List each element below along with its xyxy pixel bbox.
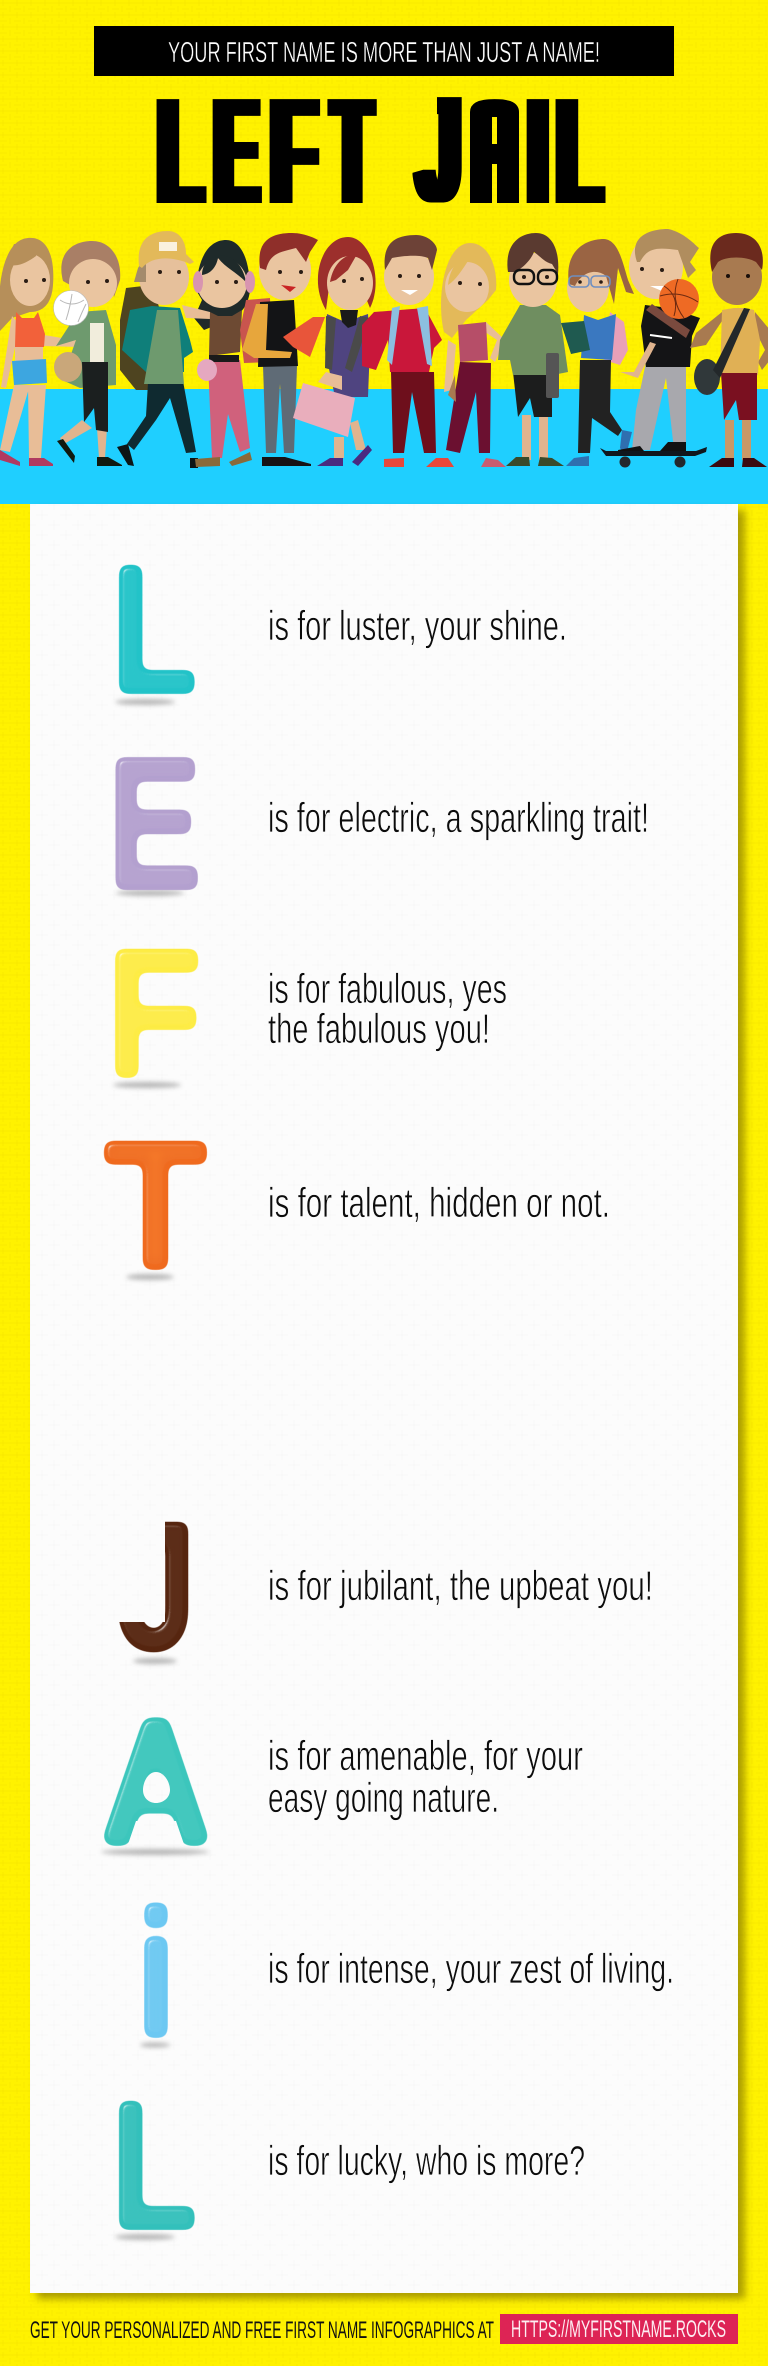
- text: F meaning: the fabulous you!: [268, 1005, 490, 1052]
- person 11: skater with basketball: [600, 229, 707, 468]
- text: F meaning: [268, 965, 507, 1052]
- text: A meaning: easy going nature.: [268, 1774, 499, 1821]
- row: letter F: [108, 918, 507, 1110]
- title: E: [214, 66, 259, 235]
- title: J: [417, 64, 461, 234]
- text: F meaning: is for fabulous, yes: [268, 965, 507, 1012]
- row: letter E: [109, 725, 649, 923]
- text: L second meaning: is for lucky, who is more?: [268, 2137, 585, 2184]
- icon: letter J brown: J: [120, 1491, 195, 1683]
- person 12: boy with tank top: [690, 233, 768, 467]
- icon: letter L teal: L: [111, 534, 195, 726]
- icon: letter J brown: [119, 1522, 188, 1666]
- person 10: girl with tablet and pink backpack: [561, 239, 634, 466]
- row: letter L: [111, 534, 567, 726]
- title: [156, 97, 606, 203]
- icon: letter A teal: A: [111, 1691, 201, 1872]
- title: A: [484, 67, 505, 236]
- text: A meaning: is for amenable, for your: [268, 1732, 583, 1779]
- person 3: backpacker with cap: [117, 231, 198, 468]
- person 6: girl with pink bag: [293, 237, 376, 466]
- person 8: blonde girl with pink top: [441, 243, 506, 467]
- main white panel: [30, 504, 738, 2293]
- person 2: girl with volleyball: [54, 241, 122, 466]
- title: L: [557, 67, 602, 236]
- row: letter I: [139, 1876, 674, 2069]
- icon: letter i light blue: i: [139, 1876, 173, 2069]
- blue floor band: [0, 389, 768, 504]
- text: L meaning: is for luster, your shine.: [268, 602, 567, 649]
- title: L: [158, 67, 203, 236]
- title: T: [333, 66, 371, 236]
- icon: letter T orange: T: [105, 1109, 206, 1301]
- row: letter L second: [111, 2070, 585, 2262]
- icon: letter E purple: E: [109, 725, 199, 923]
- icon: letter F yellow: F: [108, 918, 200, 1110]
- person 5: boy reading a book: [240, 233, 325, 466]
- icon: letter L green teal: L: [111, 2070, 195, 2262]
- person 4: girl with headphones: [182, 240, 255, 467]
- text: A meaning: [268, 1732, 583, 1821]
- text: T meaning: is for talent, hidden or not.: [268, 1179, 610, 1226]
- row: letter A: [101, 1717, 582, 1858]
- person 9: boy with glasses: [498, 233, 568, 466]
- row: letter J: [119, 1522, 650, 1666]
- title: F: [270, 68, 317, 236]
- icon: letter A teal: [101, 1717, 209, 1858]
- person 7: boy with red shirt: [362, 235, 454, 467]
- illustration: group of students: [0, 229, 768, 468]
- subtitle banner: [94, 26, 674, 76]
- title: I: [528, 68, 548, 236]
- person 1: girl with orange top: [0, 238, 80, 466]
- row: letter T: [105, 1109, 610, 1301]
